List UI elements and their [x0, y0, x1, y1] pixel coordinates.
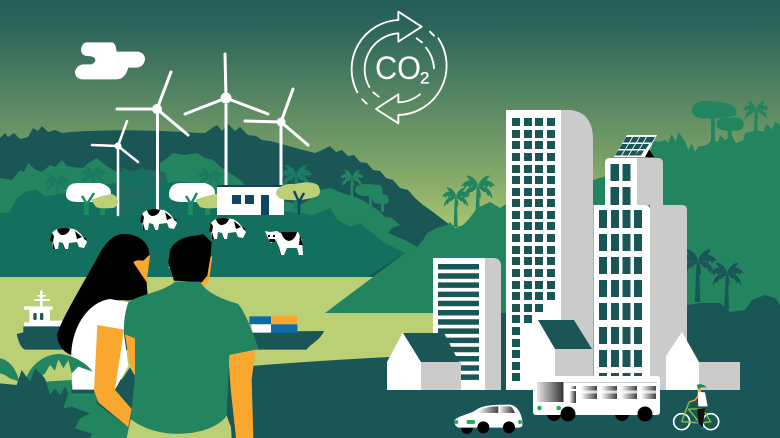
solar panel — [614, 135, 657, 157]
man shirt — [124, 282, 258, 434]
man neck and ears — [168, 256, 212, 288]
man hair — [168, 234, 212, 282]
woman arm — [94, 325, 132, 427]
cows — [50, 209, 303, 255]
cow 4 front-facing — [265, 231, 303, 255]
man left arm — [125, 334, 135, 374]
cow 2 — [140, 209, 177, 230]
small forest trees on dark hill — [355, 184, 389, 212]
turbine 1 — [92, 121, 138, 215]
left city palm 2 — [461, 175, 495, 223]
middle house — [521, 319, 593, 390]
cow 1 — [50, 228, 87, 249]
containers — [249, 316, 297, 333]
left slatted building — [433, 258, 501, 390]
cloud — [75, 42, 145, 79]
CO2 subscript: 2 — [420, 68, 429, 88]
right green hill and forest — [325, 101, 780, 323]
background palm trees — [44, 165, 313, 211]
woman hair — [57, 234, 149, 355]
woman face — [133, 255, 150, 282]
back forested hill — [0, 124, 450, 300]
tall tower — [506, 110, 593, 390]
right house — [666, 332, 740, 390]
left leaf — [0, 358, 19, 382]
dark arch behind turbine — [118, 170, 175, 215]
palm inside arch — [115, 168, 151, 218]
couple viewed from behind — [57, 234, 258, 438]
container ship — [17, 291, 324, 350]
turbine 4 — [245, 89, 308, 186]
foreground green bush — [20, 380, 132, 438]
foreground leaves and dark bush — [0, 354, 93, 438]
tree right — [276, 182, 320, 214]
turbine 3 — [185, 54, 268, 186]
ship superstructure — [24, 291, 63, 328]
tree left 1 — [66, 183, 118, 215]
stepped tower with solar panel — [594, 135, 687, 390]
background sky — [0, 0, 780, 240]
cyclist — [674, 384, 719, 430]
arched leaf — [25, 354, 93, 383]
solar panel stand — [645, 149, 654, 157]
farm house — [217, 185, 284, 215]
CO2 label: CO — [375, 50, 421, 86]
woman top — [71, 299, 128, 390]
cow 3 — [209, 218, 246, 239]
ship hull — [17, 326, 324, 350]
man trousers — [127, 416, 235, 438]
turbine 2 — [117, 72, 188, 215]
trees and farm house — [66, 182, 320, 215]
mid forest layer — [0, 153, 417, 280]
palm on dark hill — [340, 170, 364, 203]
bus — [533, 376, 660, 422]
right forest tree 1 — [692, 101, 737, 145]
tree left 2 — [169, 183, 222, 215]
field — [0, 277, 447, 400]
dark road and lower ground — [0, 295, 780, 438]
left house — [387, 332, 461, 390]
CO2 cycle icon — [352, 12, 447, 123]
wind turbines — [92, 54, 308, 215]
right forest palm — [743, 101, 769, 138]
front teal slope — [0, 182, 405, 277]
dark bush — [0, 368, 92, 438]
left city palm 1 — [442, 187, 470, 227]
man right arm — [227, 359, 236, 438]
car — [454, 405, 522, 434]
dark palms — [679, 249, 744, 309]
right forest tree 2 — [717, 118, 744, 142]
